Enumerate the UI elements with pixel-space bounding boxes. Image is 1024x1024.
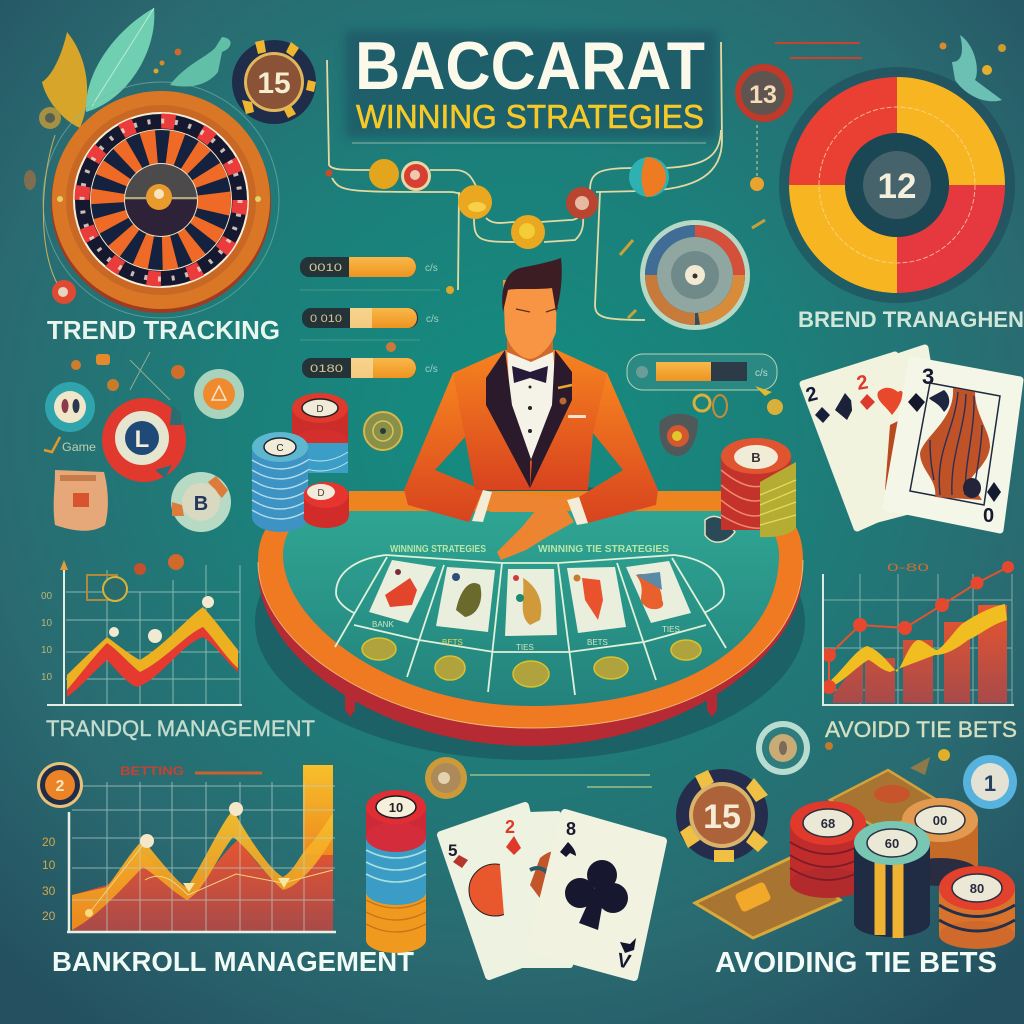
red coin and connector left of wheel (24, 135, 76, 304)
roulette wheel (43, 82, 279, 318)
chip: pale (171, 472, 231, 532)
table legs (345, 695, 717, 717)
card: five (441, 806, 560, 976)
flow connector lines with nodes (326, 42, 764, 320)
front red chip on table: D (317, 488, 325, 499)
label: brend tranagement: BREND TRANAGHEN (798, 307, 1024, 332)
card: three with royal figure: 3 (922, 364, 934, 389)
label: bankroll management: BANKROLL MANAGEMENT (52, 946, 414, 977)
dealer bow tie (512, 366, 548, 383)
coin: blue ring: 1 (984, 771, 996, 796)
bar one: 0010 (309, 262, 342, 274)
dealer cuffs (472, 490, 492, 522)
stack: red: 68 (821, 816, 835, 831)
small dial wheel (620, 220, 765, 330)
label: trend tracking: TREND TRACKING (47, 315, 280, 345)
card: club: V (615, 949, 633, 974)
card: three with royal figure (886, 360, 1020, 530)
growth chart right (822, 561, 1014, 705)
card: two (499, 814, 570, 965)
dealer lapels (486, 350, 572, 488)
chip: number 15 top (232, 40, 316, 124)
yellow bar (303, 765, 333, 855)
trend management chart left: 10 (41, 672, 53, 683)
node: teal and orange (629, 157, 669, 197)
card: two of hearts: 2 (855, 371, 870, 395)
table header text: WINNING STRATEGIES (390, 544, 486, 555)
dealer forearm (490, 492, 569, 512)
label: avoidd tie bets: AVOIDD TIE BETS (825, 717, 1017, 742)
baccarat table: BETS (587, 638, 608, 647)
baccarat table (255, 484, 805, 760)
dealer pocket and pin (558, 385, 572, 388)
card: three with royal figure: 0 (983, 505, 994, 527)
bar three: 0180 (310, 363, 343, 375)
node: red lower (566, 187, 598, 219)
node: gold ring (458, 185, 492, 219)
front red chip on table (304, 482, 349, 528)
mat front (695, 858, 840, 938)
yellow trend band (829, 604, 1007, 687)
red line and dots (829, 567, 1008, 687)
growth chart right: 0-80 (887, 562, 929, 574)
stack: blue front chips (252, 432, 308, 532)
card: five: 5 (448, 841, 457, 860)
card: club (531, 813, 663, 977)
baccarat table: BETS (442, 638, 463, 647)
coin and bar bottom center (425, 757, 652, 799)
stack: blue front chips: C (276, 443, 284, 454)
bar two: c/s (426, 314, 439, 325)
chip: red large: L (135, 426, 149, 453)
stack of chips right of table: B (751, 450, 761, 465)
shield icon (659, 414, 698, 456)
title: WINNING STRATEGIES (356, 98, 704, 135)
baccarat table: WINNING TIE STRATEGIES (538, 544, 669, 555)
card: two of spades: 2 (804, 383, 820, 407)
dealer hand (497, 505, 574, 560)
playing cards right (803, 348, 1020, 530)
right progress capsule (627, 354, 783, 456)
bar one (300, 257, 438, 277)
note: paper (54, 470, 108, 531)
dealer right arm (579, 373, 658, 523)
stack: back orange (902, 798, 978, 886)
stack of chips right of table (705, 438, 796, 542)
donut chart with number 12: 12 (878, 167, 916, 206)
small chips cluster left: Game (62, 440, 96, 454)
stack: front red orange (939, 866, 1015, 949)
bar three: c/s (425, 364, 438, 375)
trend management chart left: 00 (41, 591, 53, 602)
coin: teal ring (756, 721, 810, 775)
progress bars (300, 257, 454, 378)
chip: teal (45, 382, 95, 432)
bankroll chart bottom left: 20 (42, 909, 56, 923)
felt small text: BANK (372, 620, 394, 629)
table felt (283, 511, 779, 706)
trend management chart left (41, 554, 242, 705)
bankroll chart bottom left: BETTING (120, 764, 184, 778)
chip stack bottom left: 10 (389, 800, 403, 815)
betting line markings (335, 555, 726, 695)
baccarat table: TIES (662, 625, 680, 634)
bar two: 0 010 (310, 313, 342, 325)
stack: red and blue back: D (316, 404, 324, 415)
dealer (404, 258, 658, 560)
dealer head (503, 280, 557, 359)
stacks of chips left of table (292, 393, 402, 473)
bankroll chart bottom left: 10 (42, 858, 56, 872)
chip: number 15 top: 15 (257, 67, 291, 100)
icon: decorative leaves top left (39, 8, 231, 129)
chip: orange (194, 369, 244, 419)
betting mat and chip stacks (695, 770, 1015, 949)
bankroll chart bottom left (37, 762, 336, 932)
stack: teal and dark yellow: 60 (885, 836, 899, 851)
felt cards (369, 560, 691, 636)
coin: green ring (364, 412, 402, 450)
stack: red (790, 801, 866, 898)
chip stack bottom left (366, 790, 426, 953)
table underside (258, 540, 803, 746)
donut chart with number 12 (779, 67, 1015, 303)
bar one: c/s (425, 263, 438, 274)
red area (72, 840, 333, 932)
card: club: 8 (566, 819, 576, 839)
chip: number 13: 13 (749, 81, 777, 109)
roulette spokes (108, 147, 214, 253)
small chips cluster left (44, 352, 244, 532)
bankroll chart bottom left: 30 (42, 884, 56, 898)
title (345, 28, 717, 143)
chip: number 13 (735, 43, 862, 122)
table rim (258, 510, 803, 728)
dealer left arm (404, 373, 483, 522)
chip: number 2: 2 (56, 778, 65, 795)
right progress capsule: c/s (755, 368, 768, 379)
chip: red large (102, 398, 186, 482)
coin: blue ring (963, 755, 1017, 809)
bar three (302, 358, 438, 378)
baccarat table: TIES (516, 643, 534, 652)
card: two of hearts (852, 348, 950, 522)
label: avoiding tie bets: AVOIDING TIE BETS (715, 947, 997, 979)
roulette number ring (82, 121, 240, 279)
card: two: 2 (505, 817, 515, 837)
gold line band (72, 810, 333, 930)
chip: number 15 bottom: 15 (703, 798, 741, 836)
dealer neck (507, 335, 553, 362)
stack: back orange: 00 (933, 813, 947, 828)
red band (67, 627, 238, 697)
yellow band (67, 607, 238, 690)
bankroll chart bottom left: 20 (42, 835, 56, 849)
playing cards bottom (441, 806, 663, 977)
chip: pale: B (194, 493, 208, 515)
red bars (833, 605, 1007, 703)
icon: leaf top right (940, 35, 1006, 101)
dealer torso jacket (453, 350, 607, 490)
stack: teal and dark yellow (854, 821, 930, 938)
mat back (830, 770, 945, 830)
node: gold (369, 159, 399, 189)
felt card artwork (385, 569, 663, 625)
trend management chart left: 10 (41, 645, 53, 656)
node: gold center (511, 215, 545, 249)
dealer hair (502, 258, 562, 312)
node: gold pin right (750, 125, 764, 191)
stack: front red orange: 80 (970, 881, 984, 896)
chip: number 15 bottom (676, 769, 768, 862)
trend management chart left: 10 (41, 618, 53, 629)
label: trandol management: TRANDQL MANAGEMENT (46, 716, 315, 741)
node: red (401, 161, 431, 191)
dealer shirt (507, 350, 557, 462)
chip: number 2 (37, 762, 83, 808)
card: two of spades (803, 355, 920, 528)
title: BACCARAT (355, 28, 705, 104)
bar two (302, 308, 439, 328)
felt coins (362, 638, 701, 687)
small coins bottom right (756, 721, 1017, 809)
